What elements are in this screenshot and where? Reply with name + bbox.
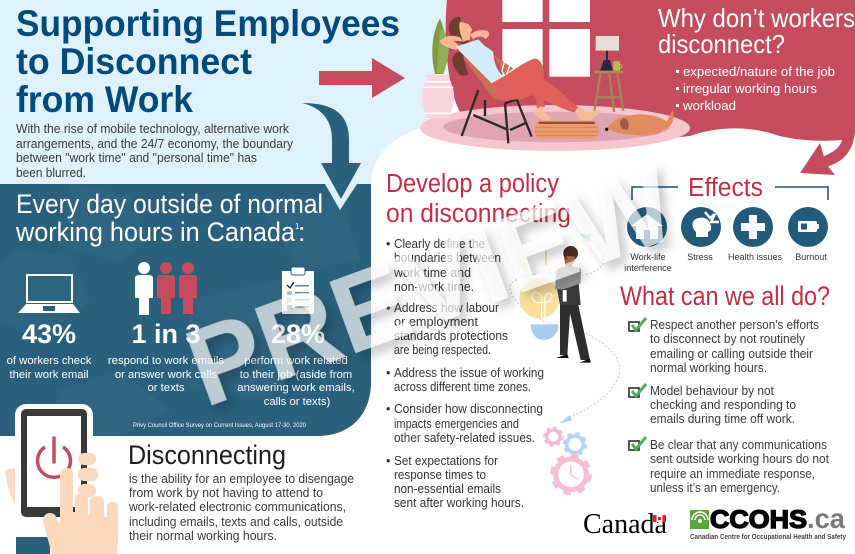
list: policy actions [386,237,544,510]
arrow: red arrow to illustration [319,58,405,98]
list: policy actions: Set expectations for [394,454,498,468]
checklist item 3: require an immediate response, [650,466,815,481]
list: reasons: irregular working hours [683,81,817,96]
heading: develop a policy: Develop a policy [386,170,559,198]
heading: every day: Every day outside of normal [16,189,323,219]
heading: effects: Effects [688,174,763,202]
icon: health issues [728,207,783,262]
checklist item 2: emails during time off work. [650,411,795,426]
title: Supporting Employees [16,3,400,44]
list: policy actions: Address the issue of working [394,366,544,380]
checklist item 2: checking and responding to [650,397,796,412]
logo: CCOHS: CCOHS [710,506,807,534]
icon: work-life interference: interference [624,263,672,273]
icon: health issues: Health issues [728,252,783,262]
illustration: woman relaxing at home [420,0,690,151]
text: introduction: arrangements, and the 24/7 economy, the boundary [16,136,293,151]
heading: every day: 1 [295,222,300,231]
rug [420,105,690,151]
list: policy actions: non-essential emails [394,482,501,496]
logo: Canada wordmark: Canada [583,509,668,540]
text: introduction: between "work time" and "personal time" has [16,150,257,165]
stat: 43%: of workers check [7,355,92,367]
title: from Work [16,79,193,120]
heading: every day: : [298,217,306,247]
list: policy actions: sent after working hours. [394,496,524,510]
icon: three people [135,262,197,315]
list: policy actions: • [386,402,390,416]
title [16,3,400,120]
list: policy actions: work time and [393,266,471,280]
stat: 1 in 3 [108,319,224,394]
list: reasons [676,64,835,113]
heading: every day [15,189,323,247]
checklist item 2: Model behaviour by not [650,383,774,398]
checklist item 2 [629,383,796,426]
heading: develop a policy: on disconnecting [386,200,571,228]
gears [544,428,590,493]
text: disconnecting definition: including emails, texts and calls, outside [129,514,343,529]
list: policy actions: response times to [394,468,486,482]
text: disconnecting definition: is the ability for an employee to disengage [129,471,354,486]
stat: 43%: their work email [9,369,89,381]
panel: light blue header background [0,0,450,186]
logo: CCOHS [690,503,847,541]
panel: teal statistics background [0,184,371,436]
heading: every day: working hours in Canada [15,217,296,247]
checklist item 1: emailing or calling outside their [650,346,814,361]
icon: work-life interference [624,207,672,273]
stat: 43% [7,319,92,381]
window [502,0,590,77]
icon: work-life interference: Work-life [630,252,666,262]
list: policy actions: across different time zones. [394,380,531,394]
heading: disconnecting: Disconnecting [128,440,286,470]
stat: 1 in 3: or texts [147,382,185,394]
checklist item 3: Be clear that any communications [650,437,827,452]
title: to Disconnect [16,41,252,82]
icon: stress: Stress [687,252,713,262]
list: policy actions: standards protections [394,329,508,343]
stat: 28%: perform work related [244,355,348,367]
list: reasons: workload [682,98,736,113]
list: policy actions: non-work time. [394,280,474,294]
text: introduction: With the rise of mobile technology, alternative work [16,121,289,136]
list: policy actions: Consider how disconnecting [394,402,543,416]
icon: stress [681,207,721,262]
footnote: Privy Council Office Survey on Current Issues, August 17-30, 2020 [133,422,306,429]
icon: clipboard checklist [282,267,314,314]
stat: 1 in 3: or answer work calls [115,369,218,381]
text: disconnecting definition [128,471,354,543]
list: policy actions: are being respected. [394,343,491,357]
chair [460,53,532,143]
text: introduction: been blurred. [16,165,86,180]
checklist item 3: sent outside working hours do not [650,451,829,466]
list: policy actions: • [386,454,390,468]
heading: why don't workers disconnect: disconnect? [658,29,785,59]
logo: CCOHS: .ca [807,503,845,534]
list: policy actions: other safety-related issues. [394,431,535,445]
heading: why don't workers disconnect [658,3,855,59]
text: disconnecting definition: from work by not having to attend to [129,485,323,500]
illustration: man with lightbulb and gears [510,234,620,493]
icon: burnout: Burnout [795,252,827,262]
stat: 28%: to their job (aside from [240,369,352,381]
watermark: PREVIEW: PREVIEW [171,141,690,431]
stat: 1 in 3: respond to work emails [108,355,224,367]
list: policy actions: boundaries between [394,251,501,265]
list: policy actions: Address how labour [394,301,499,315]
icon: burnout [788,207,828,262]
stat: 28%: answering work emails, [237,382,355,394]
checklist item 1: Respect another person's efforts [650,317,819,332]
stat: 28%: 28% [271,319,325,349]
side table and lamp [594,36,623,112]
list: policy actions: • [386,366,390,380]
list: policy actions: or employment [394,315,479,329]
arrow: teal curved arrow [302,103,361,210]
heading: effects [632,174,828,202]
text: disconnecting definition: their normal working hours. [129,528,277,543]
checklist item 3 [629,437,829,495]
list: reasons: expected/nature of the job [683,64,835,79]
icon: laptop [18,275,80,313]
checklist item 1: to disconnect by not routinely [650,331,805,346]
list: policy actions: • [386,237,390,251]
checklist item 1: normal working hours. [650,360,767,375]
arrow: red curved tail head [800,143,835,175]
stat: 28% [237,319,355,408]
checklist item 1 [629,317,819,375]
footstool [534,121,599,139]
potted plant [422,18,454,118]
heading: develop a policy [386,170,571,228]
stat: 43%: 43% [22,319,76,349]
list: policy actions: • [386,301,390,315]
icon: hand holding phone [5,404,118,554]
person [440,17,602,122]
stat: 28%: calls or texts) [264,396,331,408]
list: policy actions: Clearly define the [394,237,485,251]
dog [605,110,674,136]
list: policy actions: impacts emergencies and [394,417,519,431]
stat: 1 in 3: 1 in 3 [131,319,201,349]
panel: red why-not background [446,0,855,167]
text: introduction [16,121,293,180]
checklist item 3: unless it’s an emergency. [650,480,780,495]
text: disconnecting definition: work-related electronic communications, [128,499,346,514]
